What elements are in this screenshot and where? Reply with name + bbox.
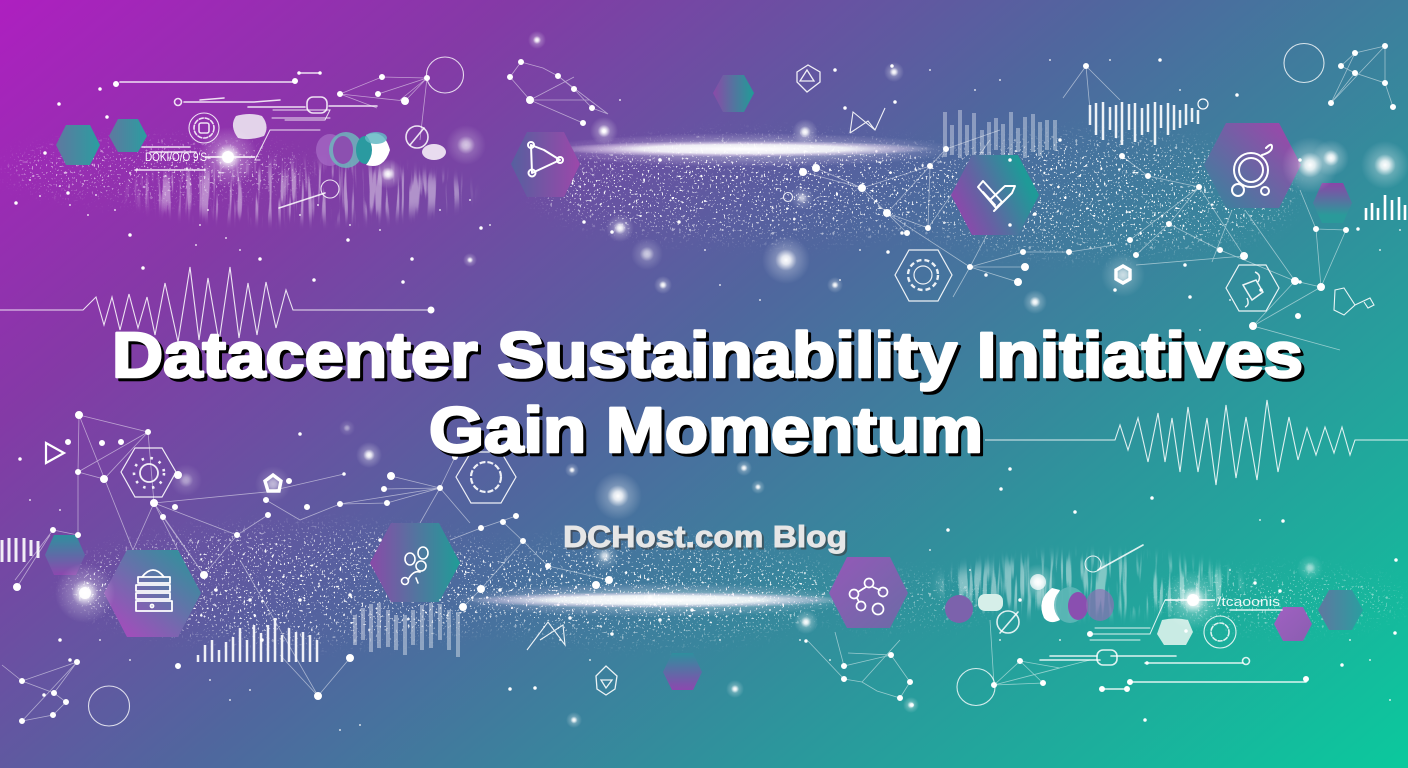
star dust texture (1, 126, 1408, 652)
left-edge bars (2, 538, 38, 562)
title line 2: Gain Momentum (429, 394, 983, 466)
icon: dotted ring hexagon (456, 452, 516, 503)
hexagons top row (56, 75, 1352, 235)
overlapping blobs top (316, 132, 390, 168)
bright light streak bottom (450, 583, 860, 617)
icon: shield top (797, 65, 820, 92)
white bar chart bottom (198, 618, 317, 662)
circuit traces top-left (120, 73, 428, 208)
pulse line top (0, 267, 430, 342)
icon: ring small right (784, 192, 792, 202)
bright small icons (46, 266, 1130, 491)
icon: triangle outline (46, 443, 64, 463)
pulse line bottom (985, 400, 1408, 485)
pulse end dot top (428, 306, 434, 314)
outlined circles (88, 44, 1324, 726)
icon: linked leaves (402, 547, 428, 584)
icon: leaf sketch right (1334, 288, 1374, 315)
garbled data label top: DOKI/O/O 9'S (145, 150, 207, 164)
icon: orbit rings (1232, 145, 1272, 196)
fine waveform clutter (125, 158, 1244, 620)
hexagons bottom row (45, 523, 1363, 690)
icon: shield bottom (596, 666, 617, 695)
subtitle: DCHost.com Blog (563, 519, 847, 554)
icon: glowing hex top (1116, 266, 1130, 283)
title line 1: Datacenter Sustainability Initiatives (112, 319, 1303, 391)
icon: triangle network (528, 142, 563, 176)
icon: server stack (136, 570, 172, 611)
icon: ring cluster (850, 578, 888, 614)
outlined hexagon icons (121, 65, 1374, 695)
circuit traces bottom-right (997, 545, 1306, 689)
icon: leaf hexagon (1226, 265, 1279, 311)
icon: gear hexagon (895, 250, 952, 301)
overlapping blobs bottom (945, 587, 1114, 623)
light blobs (233, 114, 1193, 645)
icon: glowing pentagon bottom (265, 475, 281, 491)
icon: chained heart (978, 181, 1015, 211)
bright light streak top (540, 133, 960, 167)
white bar chart top (1090, 102, 1198, 145)
icon: butterfly lines top (850, 108, 885, 133)
translucent bar chart top (945, 110, 1055, 158)
small ring on bar chart (1198, 99, 1208, 109)
translucent bar chart bottom (355, 603, 458, 657)
title (112, 319, 1303, 466)
larger star dust (0, 126, 1404, 652)
right-edge bars (1366, 195, 1405, 220)
garbled data label bottom: /tcaoonis (1217, 594, 1281, 609)
icon: sun hexagon (121, 448, 176, 497)
icon: butterfly lines bottom (527, 622, 565, 650)
icons in hexagons (136, 142, 1272, 614)
